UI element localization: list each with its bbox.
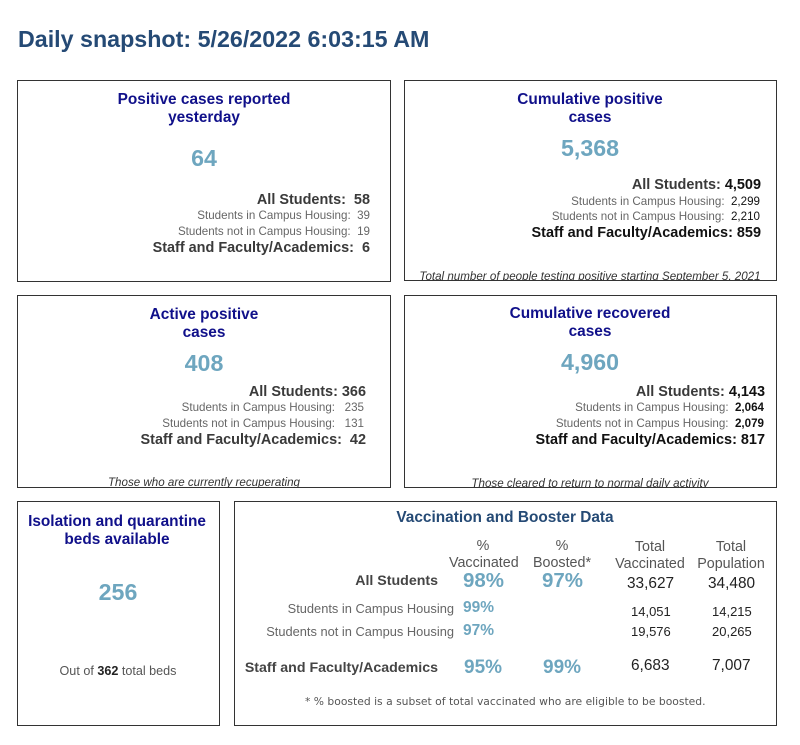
heading: Active positive cases [150, 306, 258, 341]
breakdown: Staff and Faculty/Academics: 817 [536, 432, 765, 448]
panel: cumulative positive cases [404, 80, 777, 281]
breakdown [536, 384, 765, 448]
breakdown: All Students: 4,143 [636, 384, 765, 400]
big number: 5,368 [561, 135, 619, 161]
breakdown [141, 384, 366, 448]
heading: Positive cases reported yesterday [118, 91, 290, 126]
header: total vaccinated: Total Vaccinated [615, 539, 685, 572]
breakdown: Students not in Campus Housing: 19 [178, 225, 370, 238]
title: Daily snapshot: 5/26/2022 6:03:15 AM [18, 26, 429, 52]
header: total population: Total Population [697, 539, 765, 572]
row: students in campus housing [288, 599, 752, 619]
row: students not in campus housing: 97% [463, 622, 494, 639]
bed total note: Out of 362 total beds [60, 664, 176, 678]
row: students not in campus housing: 19,576 [631, 624, 671, 639]
breakdown [153, 192, 370, 256]
breakdown: Students in Campus Housing: 2,064 [575, 401, 764, 414]
big number: 4,960 [561, 349, 619, 375]
breakdown: All Students: 366 [249, 384, 366, 400]
heading: Cumulative recovered cases [510, 305, 670, 340]
row: staff and faculty: 7,007 [712, 657, 751, 674]
row: all students: 98% [463, 569, 504, 592]
breakdown: Students not in Campus Housing: 2,210 [552, 210, 760, 223]
row: staff and faculty: 6,683 [631, 657, 670, 674]
panel: active positive cases [17, 295, 391, 488]
breakdown: Staff and Faculty/Academics: 42 [141, 432, 366, 448]
panel: isolation and quarantine beds [17, 501, 220, 726]
breakdown: Students in Campus Housing: 39 [197, 209, 370, 222]
row: students in campus housing: Students in Campus Housing [288, 601, 454, 616]
footnote: * % boosted is a subset of total vaccinated who are eligible to be boosted. [305, 695, 706, 708]
breakdown: Students in Campus Housing: 235 [182, 401, 364, 414]
breakdown: All Students: 58 [257, 192, 370, 208]
panel: positive cases reported yesterday [17, 80, 391, 282]
big number: 408 [185, 350, 223, 376]
row: students not in campus housing: 20,265 [712, 624, 752, 639]
header: % vaccinated: % Vaccinated [449, 538, 519, 571]
heading: Cumulative positive cases [517, 91, 663, 126]
row: all students: All Students [355, 573, 438, 589]
row: all students: 97% [542, 569, 583, 592]
breakdown: Staff and Faculty/Academics: 859 [532, 225, 761, 241]
breakdown [532, 177, 761, 241]
row: students in campus housing: 14,051 [631, 604, 671, 619]
heading: Isolation and quarantine beds available [28, 513, 206, 548]
row: students not in campus housing [266, 622, 752, 639]
breakdown: Students not in Campus Housing: 2,079 [556, 417, 764, 430]
row: staff and faculty [245, 657, 751, 678]
heading: Vaccination and Booster Data [396, 509, 614, 526]
breakdown: Staff and Faculty/Academics: 6 [153, 240, 370, 256]
row: all students [355, 569, 755, 592]
column headers [449, 538, 765, 572]
big number: 256 [99, 579, 137, 605]
row: students in campus housing: 99% [463, 599, 494, 616]
row: staff and faculty: 95% [464, 657, 502, 678]
row: students not in campus housing: Students not in Campus Housing [266, 624, 454, 639]
row: all students: 34,480 [708, 575, 755, 592]
header: % boosted: % Boosted* [533, 538, 591, 571]
panel: vaccination and booster data [234, 501, 777, 726]
breakdown: Students in Campus Housing: 2,299 [571, 195, 760, 208]
row: staff and faculty: 99% [543, 657, 581, 678]
row: all students: 33,627 [627, 575, 674, 592]
row: students in campus housing: 14,215 [712, 604, 752, 619]
panel: cumulative recovered cases [404, 295, 777, 488]
breakdown: All Students: 4,509 [632, 177, 761, 193]
big number: 64 [191, 145, 217, 171]
breakdown: Students not in Campus Housing: 131 [162, 417, 364, 430]
row: staff and faculty: Staff and Faculty/Academics [245, 660, 438, 676]
